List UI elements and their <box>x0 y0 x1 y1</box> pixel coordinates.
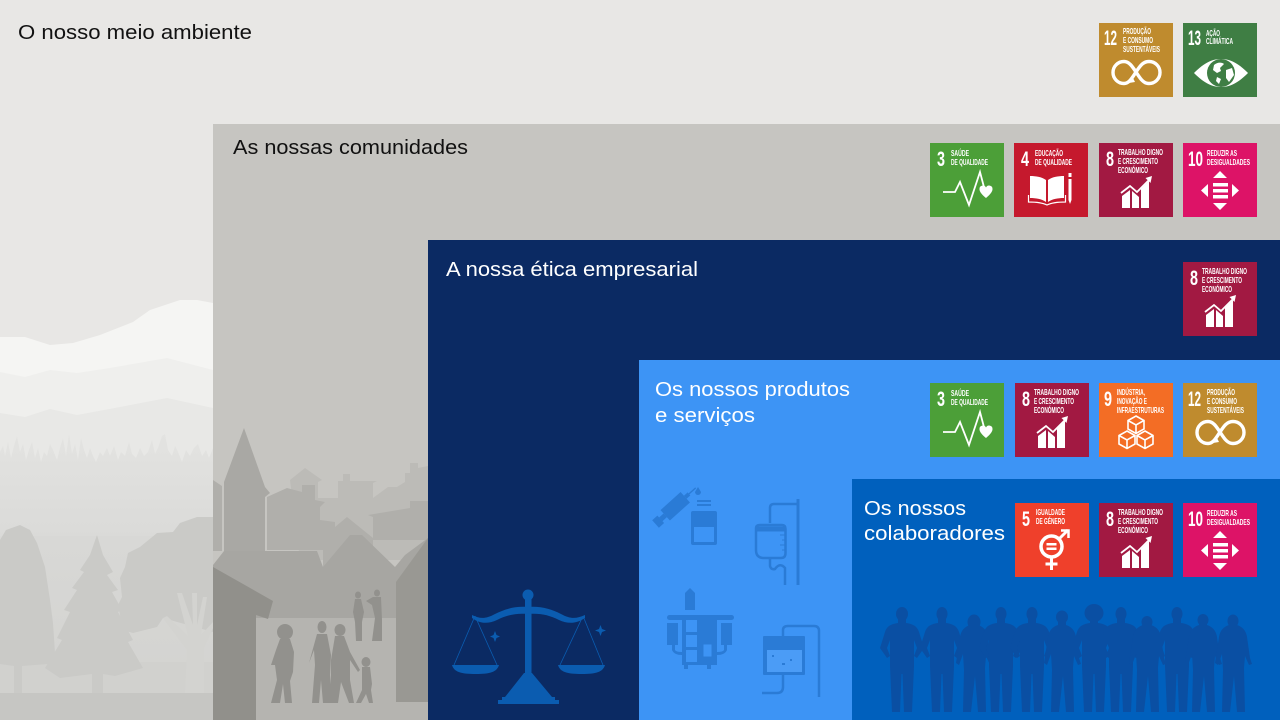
SDG tile 12: SUSTENTÁVEIS <box>1207 404 1244 415</box>
SDG tile 12: PRODUÇÃO <box>1207 387 1235 397</box>
landscape: mountains and forest <box>0 300 213 720</box>
SDG tile 12: E CONSUMO <box>1207 396 1237 406</box>
SDG tile 8: 8 <box>1106 508 1114 531</box>
panel: As nossas comunidades <box>213 124 1280 720</box>
SDG tile 12: PRODUÇÃO <box>1123 26 1151 36</box>
SDG tile 8: 8 <box>1190 267 1198 290</box>
SDG tile 9: INOVAÇÃO E <box>1117 396 1147 406</box>
SDG tile 10 <box>1183 503 1257 577</box>
SDG tile 13 <box>1183 23 1257 97</box>
SDG tile 4: EDUCAÇÃO <box>1035 148 1063 158</box>
SDG tile 12 <box>1183 383 1257 457</box>
SDG tile 8: 8 <box>1022 388 1030 411</box>
SDG tile 8: E CRESCIMENTO <box>1034 396 1074 406</box>
SDG tile 3: DE QUALIDADE <box>951 397 988 407</box>
SDG tile 9: INDÚSTRIA, <box>1117 386 1145 397</box>
panel: A nossa ética empresarial <box>428 240 1280 720</box>
village illustration <box>213 428 428 720</box>
SDG tile 9 <box>1099 383 1173 457</box>
SDG tile 3: 3 <box>937 388 945 411</box>
SDG tile 8: E CRESCIMENTO <box>1118 156 1158 166</box>
heading: As nossas comunidades: As nossas comunidades <box>233 136 468 159</box>
SDG tile 8: TRABALHO DIGNO <box>1118 507 1163 517</box>
SDG tile 3 <box>930 143 1004 217</box>
SDG tile 13: 13 <box>1188 27 1201 50</box>
SDG tile 5 <box>1015 503 1089 577</box>
SDG tile 8: TRABALHO DIGNO <box>1118 147 1163 157</box>
SDG tile 10: DESIGUALDADES <box>1207 157 1250 167</box>
SDG tile 8 <box>1015 383 1089 457</box>
SDG tile 12: E CONSUMO <box>1123 35 1153 45</box>
SDG tile 8 <box>1099 503 1173 577</box>
icon: balance scales <box>452 590 606 704</box>
SDG tile 8 <box>1183 262 1257 336</box>
SDG tile 3 <box>930 383 1004 457</box>
people in the village <box>271 590 382 703</box>
panel: Os nossos colaboradores <box>852 479 1280 720</box>
heading: A nossa ética empresarial: A nossa ética empresarial <box>446 258 698 281</box>
SDG tile 10: REDUZIR AS <box>1207 508 1237 518</box>
people silhouettes <box>880 604 1252 712</box>
SDG tile 4: DE QUALIDADE <box>1035 157 1072 167</box>
SDG tile 5: DE GÉNERO <box>1036 515 1065 526</box>
SDG tile 8 <box>1099 143 1173 217</box>
heading: Os nossos produtos e serviços <box>655 378 850 427</box>
SDG tile 10: DESIGUALDADES <box>1207 517 1250 527</box>
heading: Os nossos produtos e serviços: Os nossos produtos <box>655 378 850 401</box>
SDG tile 5: IGUALDADE <box>1036 507 1065 517</box>
SDG tile 3: SAÚDE <box>951 387 969 398</box>
SDG tile 8: ECONÓMICO <box>1118 164 1148 175</box>
SDG tile 3: DE QUALIDADE <box>951 157 988 167</box>
icon: syringe and vial <box>651 483 717 545</box>
heading: Os nossos colaboradores: colaboradores <box>864 522 1005 545</box>
panel: Os nossos produtos e serviços <box>639 360 1280 720</box>
SDG tile 8: 8 <box>1106 148 1114 171</box>
SDG tile 12: 12 <box>1104 27 1117 50</box>
SDG tile 8: ECONÓMICO <box>1118 524 1148 535</box>
SDG tile 12 <box>1099 23 1173 97</box>
icon: infusion stand <box>667 588 734 669</box>
SDG tile 9: INFRAESTRUTURAS <box>1117 405 1164 415</box>
SDG tile 8: ECONÓMICO <box>1202 283 1232 294</box>
SDG tile 8: ECONÓMICO <box>1034 404 1064 415</box>
SDG tile 10: REDUZIR AS <box>1207 148 1237 158</box>
SDG tile 10: 10 <box>1188 508 1203 531</box>
SDG tile 4 <box>1014 143 1088 217</box>
SDG tile 13: AÇÃO <box>1206 28 1220 38</box>
SDG tile 8: TRABALHO DIGNO <box>1202 266 1247 276</box>
SDG tile 12: 12 <box>1188 388 1201 411</box>
icon: IV bag <box>756 499 798 585</box>
SDG tile 3: 3 <box>937 148 945 171</box>
SDG tile 10: 10 <box>1188 148 1203 171</box>
SDG tile 10 <box>1183 143 1257 217</box>
icon: dialysis machine <box>762 626 819 697</box>
SDG tile 3: SAÚDE <box>951 147 969 158</box>
heading: Os nossos produtos e serviços: e serviços <box>655 404 755 427</box>
SDG tile 8: TRABALHO DIGNO <box>1034 387 1079 397</box>
SDG tile 8: E CRESCIMENTO <box>1118 516 1158 526</box>
SDG tile 8: E CRESCIMENTO <box>1202 275 1242 285</box>
heading: O nosso meio ambiente: O nosso meio ambiente <box>18 21 252 44</box>
SDG tile 5: 5 <box>1022 508 1030 531</box>
heading: Os nossos colaboradores <box>864 497 1005 545</box>
SDG tile 12: SUSTENTÁVEIS <box>1123 43 1160 54</box>
SDG tile 9: 9 <box>1104 388 1112 411</box>
heading: Os nossos colaboradores: Os nossos <box>864 497 966 520</box>
SDG tile 13: CLIMÁTICA <box>1206 35 1233 46</box>
SDG tile 4: 4 <box>1021 148 1029 171</box>
